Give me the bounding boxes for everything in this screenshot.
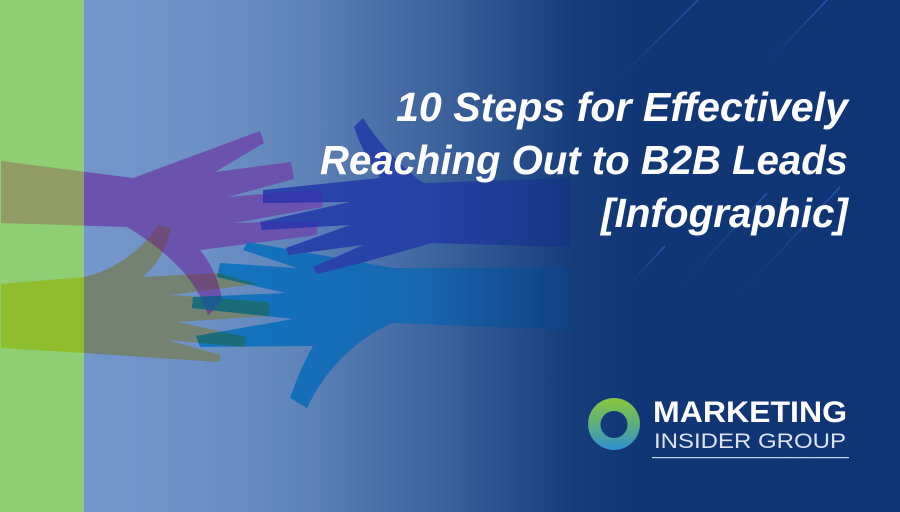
hand: blue xyxy=(260,118,566,274)
hand: purple xyxy=(1,131,323,296)
logo underline xyxy=(652,457,849,458)
title: Reaching Out to B2B Leads xyxy=(320,137,848,183)
hand: olive xyxy=(1,225,268,362)
logo subline: INSIDER GROUP xyxy=(654,430,846,453)
green side bar xyxy=(0,0,84,512)
title xyxy=(320,84,850,236)
diagonal light streaks xyxy=(610,0,840,298)
hand: cyan xyxy=(192,242,563,408)
icon: ring xyxy=(588,398,640,450)
logo wordmark: MARKETING xyxy=(653,396,847,429)
title: 10 Steps for Effectively xyxy=(396,84,850,130)
logo: Marketing Insider Group xyxy=(588,396,849,458)
title: [Infographic] xyxy=(599,190,849,236)
